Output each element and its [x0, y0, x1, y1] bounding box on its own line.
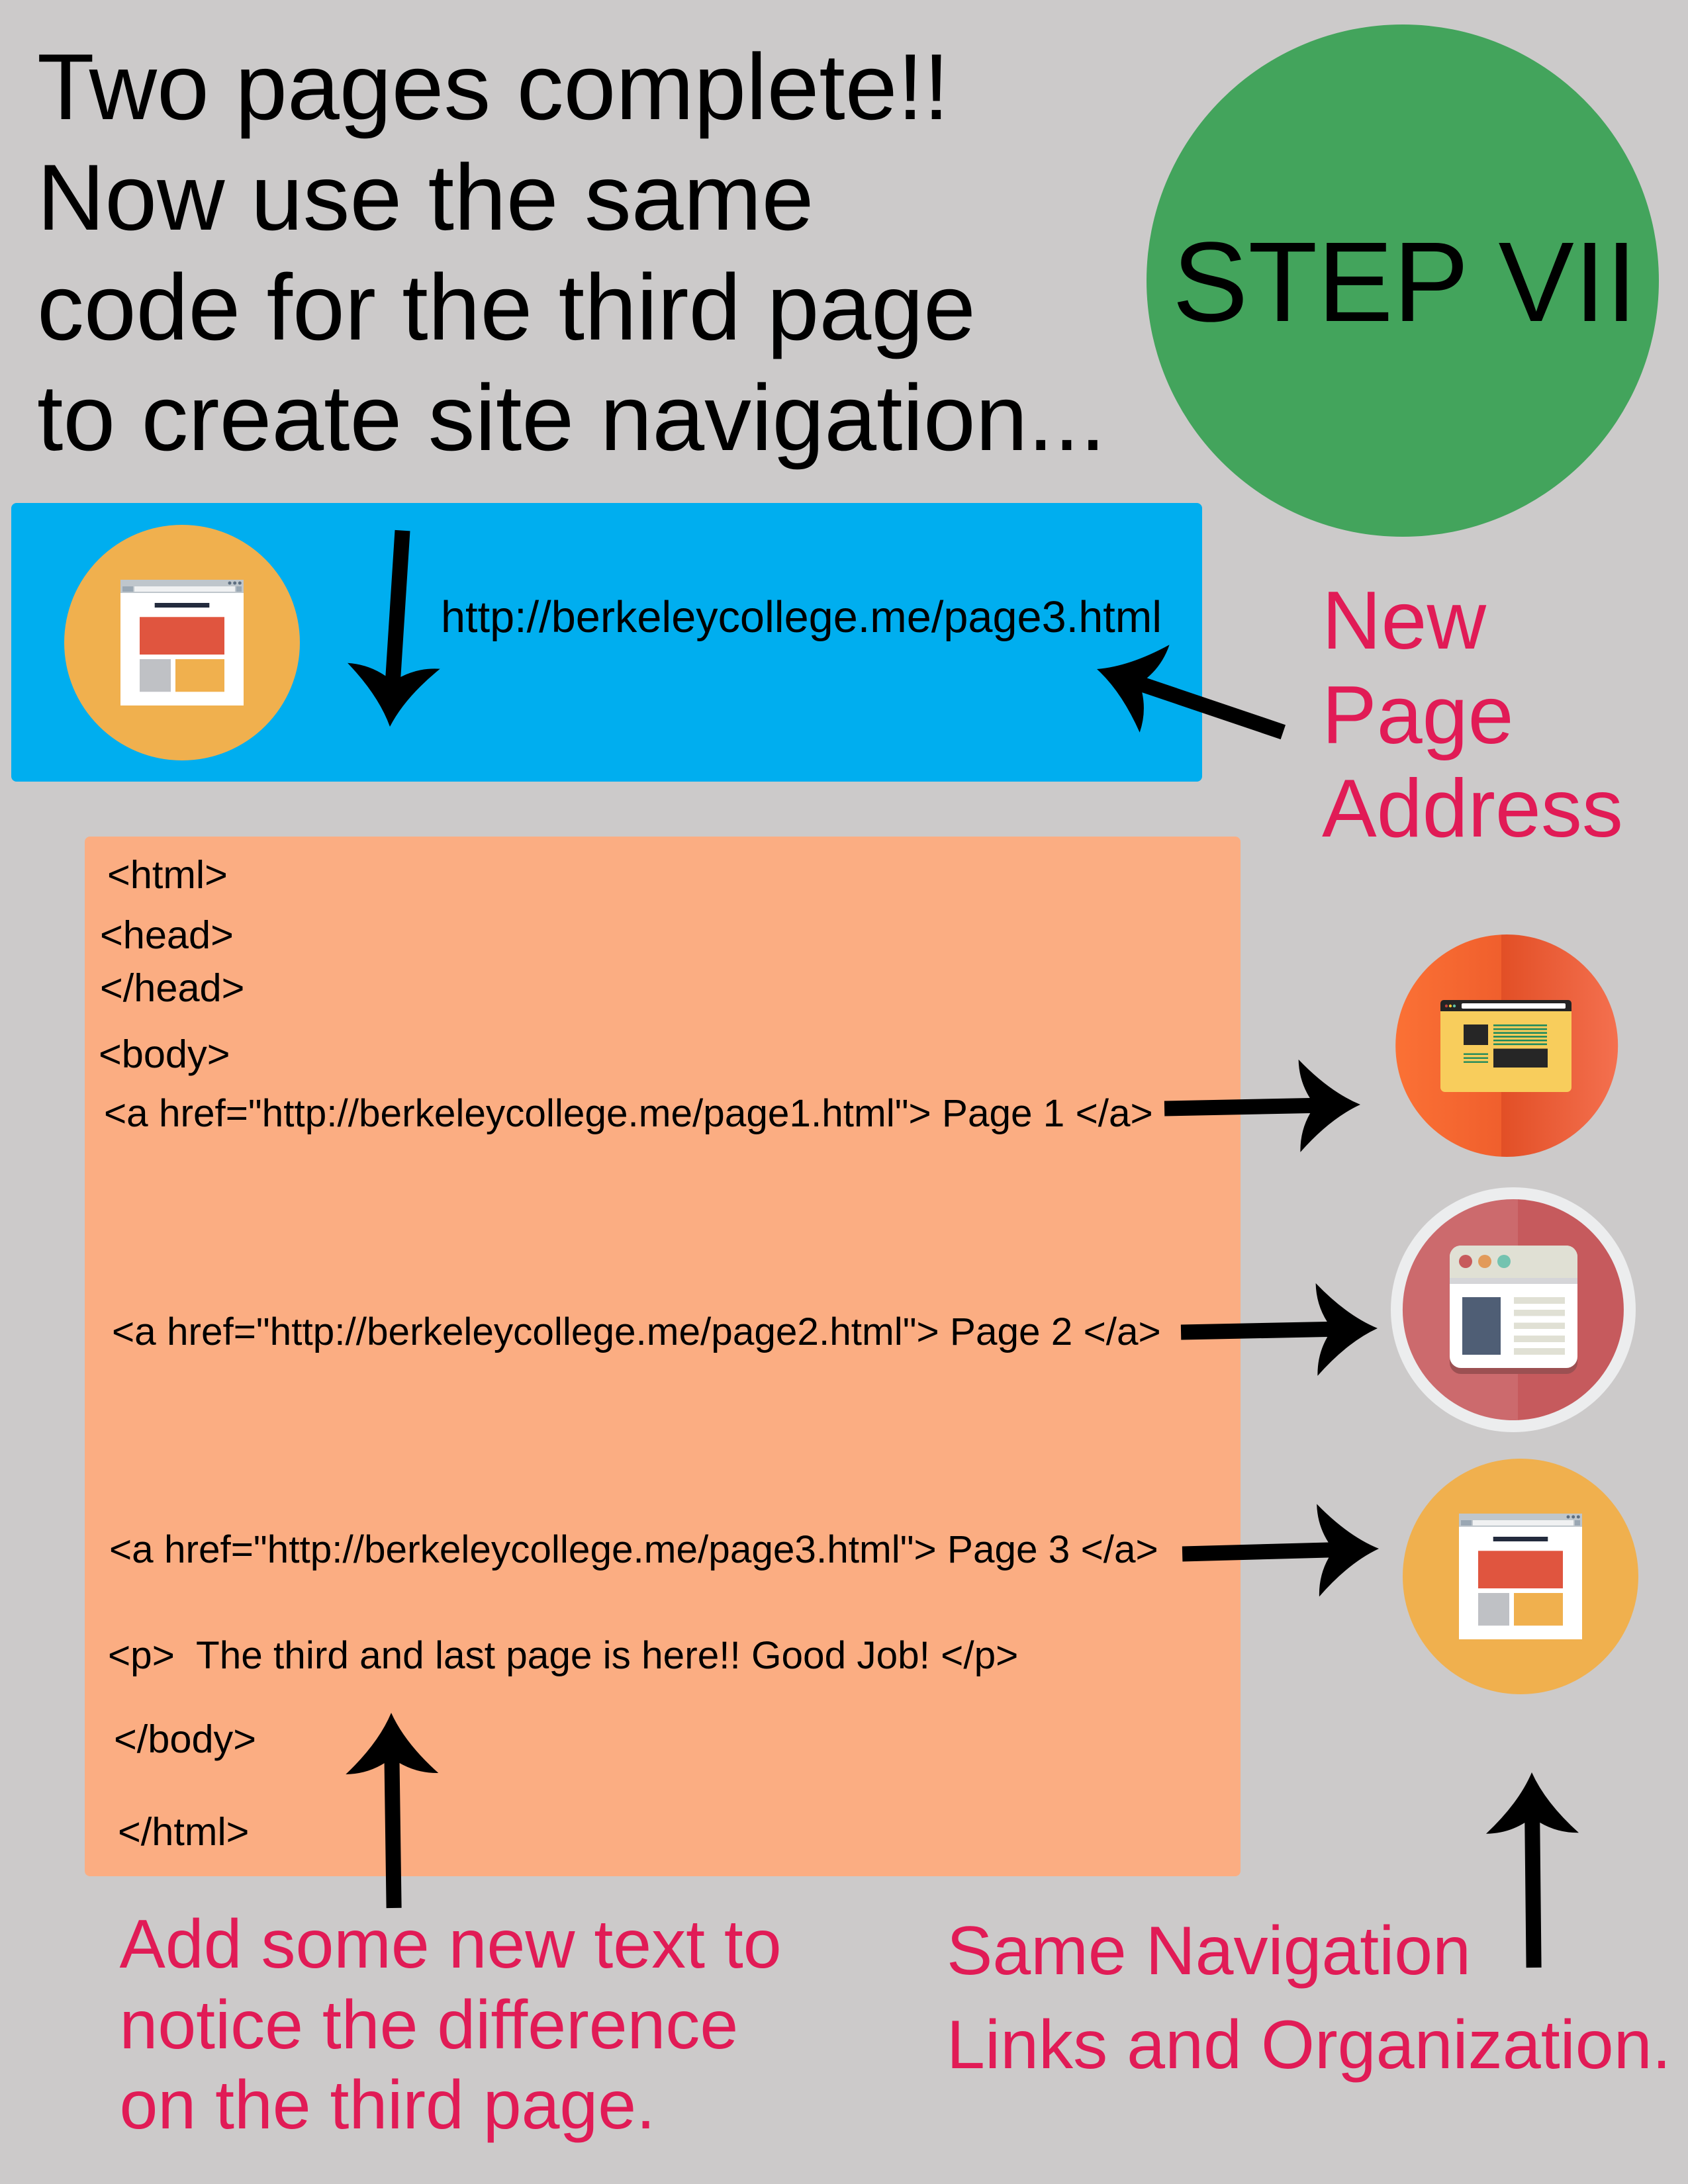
arrow: page 2 link	[1180, 1282, 1378, 1379]
panel: html code: The third and last page is here!! Good Job! </p>	[196, 1634, 1018, 1677]
panel: html code: </html>	[118, 1809, 249, 1854]
icon: page 1 website	[1395, 934, 1618, 1157]
callout: same navigation: Links and Organization.	[947, 2007, 1671, 2083]
callout: new text: Add some new text to	[119, 1906, 782, 1983]
panel: html code: <a href="http://berkeleycollege.me/page2.html"> Page 2 </a>	[112, 1310, 1161, 1353]
title: Now use the same	[37, 146, 814, 250]
arrow: page 3 link	[1181, 1502, 1380, 1600]
arrow: page 1 link	[1164, 1058, 1361, 1155]
callout: same navigation: Same Navigation	[947, 1913, 1471, 1989]
callout: new text: on the third page.	[119, 2067, 655, 2144]
step badge: STEP VII	[1172, 219, 1637, 345]
title: to create site navigation...	[37, 366, 1106, 471]
url text: http://berkeleycollege.me/page3.html	[441, 593, 1162, 642]
panel: new page address	[11, 503, 1202, 782]
title	[37, 35, 1106, 471]
icon: third page website	[64, 525, 300, 760]
callout: new page address: Address	[1322, 763, 1623, 854]
arrow: down in blue panel	[344, 527, 449, 729]
callout: same navigation	[947, 1913, 1671, 2083]
panel: html code: <a href="http://berkeleycollege.me/page3.html"> Page 3 </a>	[109, 1528, 1158, 1571]
callout: new page address	[1322, 575, 1623, 854]
panel: html code: <html>	[107, 852, 228, 897]
panel: html code: <a href="http://berkeleycollege.me/page1.html"> Page 1 </a>	[104, 1092, 1153, 1135]
panel: html code: </head>	[100, 966, 244, 1010]
step badge	[1147, 24, 1659, 537]
callout: new text: notice the difference	[119, 1987, 738, 2064]
callout: new text	[119, 1906, 782, 2144]
arrow: up to new text	[345, 1712, 440, 1909]
panel: html code: <p>	[108, 1634, 175, 1677]
callout: new page address: Page	[1322, 670, 1514, 761]
icon: page 2 website	[1391, 1187, 1636, 1432]
panel: html code: <head>	[100, 913, 234, 957]
callout: new page address: New	[1322, 575, 1487, 666]
arrow: up to navigation icons	[1485, 1772, 1580, 1968]
title: Two pages complete!!	[37, 35, 949, 140]
icon: page 3 website	[1403, 1459, 1638, 1694]
panel: html code: </body>	[114, 1717, 256, 1761]
arrow: to page address	[1082, 625, 1298, 776]
panel: html code: <body>	[99, 1032, 230, 1076]
title: code for the third page	[37, 255, 976, 360]
panel: html code	[85, 837, 1241, 1876]
